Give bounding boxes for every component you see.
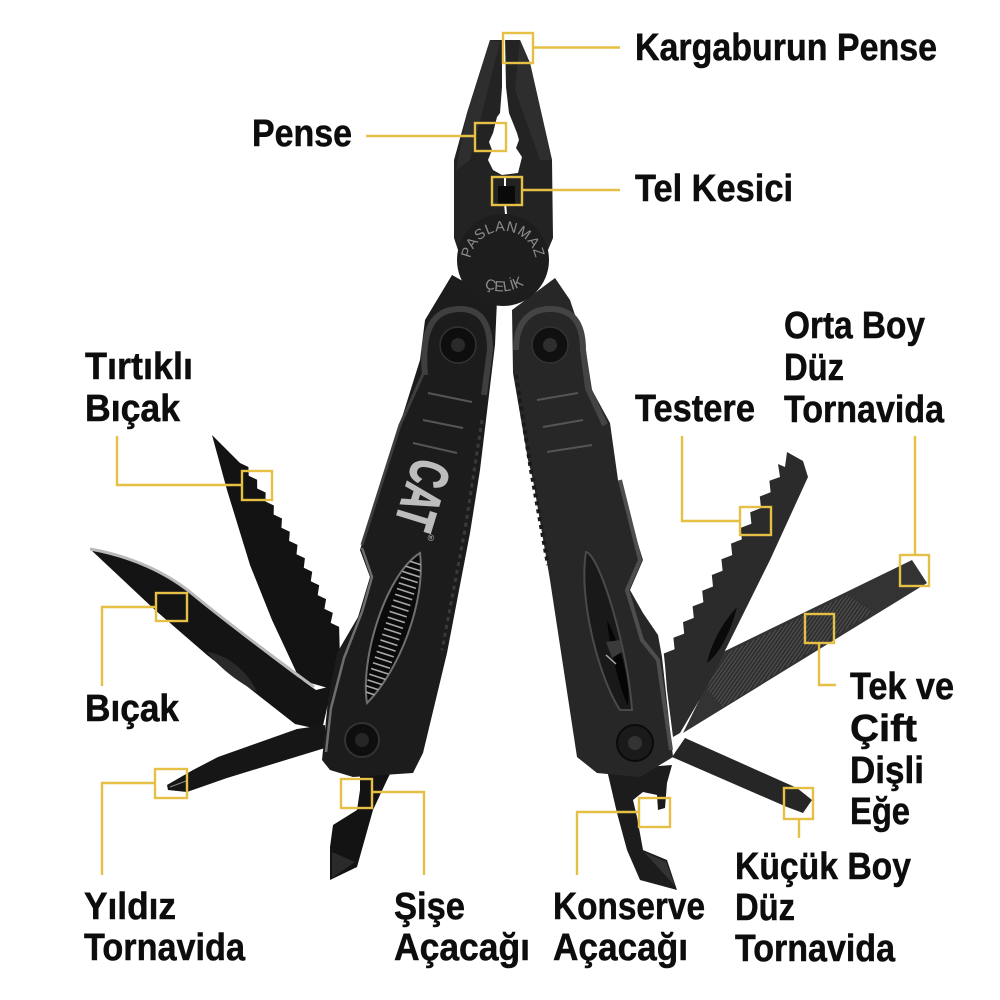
right handle serrated inner edge (516, 375, 548, 565)
callout: Tırtıklı Bıçak: Tırtıklı (85, 346, 193, 388)
callout: Küçük Boy Düz Tornavida: Küçük Boy (735, 846, 911, 888)
callout: Testere (635, 388, 771, 535)
registered mark: ® (428, 533, 435, 543)
spring coils (372, 562, 415, 695)
callout: Bıçak (85, 593, 187, 730)
callout: Yıldız Tornavida: Yıldız (84, 886, 176, 928)
callout: Tek ve Çift Dişli Eğe (805, 614, 954, 833)
left handle highlight (326, 548, 372, 752)
left handle serrated inner edge (442, 420, 482, 650)
plier head (454, 40, 553, 306)
callout: Küçük Boy Düz Tornavida (735, 788, 911, 970)
dark slit in slot (607, 620, 628, 706)
callout: Tek ve Çift Dişli Eğe: Tek ve (850, 666, 954, 708)
tool: can opener (607, 765, 677, 890)
engraved text top: PASLANMAZ (461, 221, 545, 258)
callout: Orta Boy Düz Tornavida (784, 305, 945, 586)
tool: serrated blade (212, 435, 340, 690)
callout: Şişe Açacağı (341, 779, 530, 969)
callout: Testere: Testere (635, 388, 755, 430)
left upper bolt (440, 327, 476, 363)
callout: Orta Boy Düz Tornavida: Orta Boy (784, 305, 925, 347)
callout: Yıldız Tornavida: Tornavida (84, 927, 246, 969)
callout: Pense (252, 113, 506, 155)
callout: Küçük Boy Düz Tornavida: Tornavida (735, 928, 896, 970)
tool: bottle opener (330, 770, 392, 880)
callout: Konserve Açacağı: Açacağı (553, 927, 688, 969)
callout: Tel Kesici: Tel Kesici (635, 168, 793, 210)
knife thumb hole (207, 652, 257, 692)
spring slot (366, 553, 421, 703)
plier jaw gap (488, 36, 522, 175)
tool: phillips screwdriver (167, 725, 325, 792)
callout: Pense: Pense (252, 113, 352, 155)
callout: Tırtıklı Bıçak: Bıçak (85, 388, 181, 430)
right lower bolt (617, 725, 653, 761)
mechanism in slot (606, 655, 616, 664)
left lower bolt (345, 723, 379, 757)
wire cutter slit (505, 177, 506, 214)
callout: Şişe Açacağı: Açacağı (394, 927, 530, 969)
left handle (322, 275, 497, 777)
right upper bolt (532, 327, 568, 363)
callout: Konserve Açacağı (553, 798, 705, 969)
right handle highlight (620, 480, 671, 750)
callout: Tek ve Çift Dişli Eğe: Dişli (850, 750, 924, 792)
callout: Orta Boy Düz Tornavida: Düz (784, 347, 844, 389)
callout: Tek ve Çift Dişli Eğe: Eğe (850, 791, 910, 833)
callout: Tırtıklı Bıçak (85, 346, 272, 500)
left lug band (424, 309, 490, 395)
tool: small flat screwdriver (672, 738, 812, 813)
engraved text bottom: ÇELİK (486, 276, 524, 292)
tool: file (683, 560, 927, 733)
tool: saw (664, 452, 808, 737)
callout: Şişe Açacağı: Şişe (394, 886, 465, 928)
callout: Tel Kesici (492, 168, 793, 210)
CAT logo: CAT (383, 452, 461, 537)
left handle grip ridges (413, 393, 472, 453)
callout: Orta Boy Düz Tornavida: Tornavida (784, 389, 945, 431)
plier facet shading (456, 40, 500, 170)
callout: Bıçak: Bıçak (85, 688, 180, 730)
callout: Konserve Açacağı: Konserve (553, 886, 705, 928)
tool: knife blade (90, 549, 332, 730)
callout: Tek ve Çift Dişli Eğe: Çift (850, 708, 917, 750)
right handle (512, 278, 673, 777)
pivot engraved disc (457, 214, 549, 306)
file teeth (705, 595, 873, 707)
right handle slot (584, 552, 632, 710)
callout: Küçük Boy Düz Tornavida: Düz (735, 887, 795, 929)
saw hole (707, 607, 737, 663)
callout: Kargaburun Pense (503, 27, 937, 69)
callout: Yıldız Tornavida (84, 769, 246, 969)
right handle grip ridges (537, 393, 592, 452)
right lug band (516, 309, 605, 425)
callout: Kargaburun Pense: Kargaburun Pense (635, 27, 937, 69)
